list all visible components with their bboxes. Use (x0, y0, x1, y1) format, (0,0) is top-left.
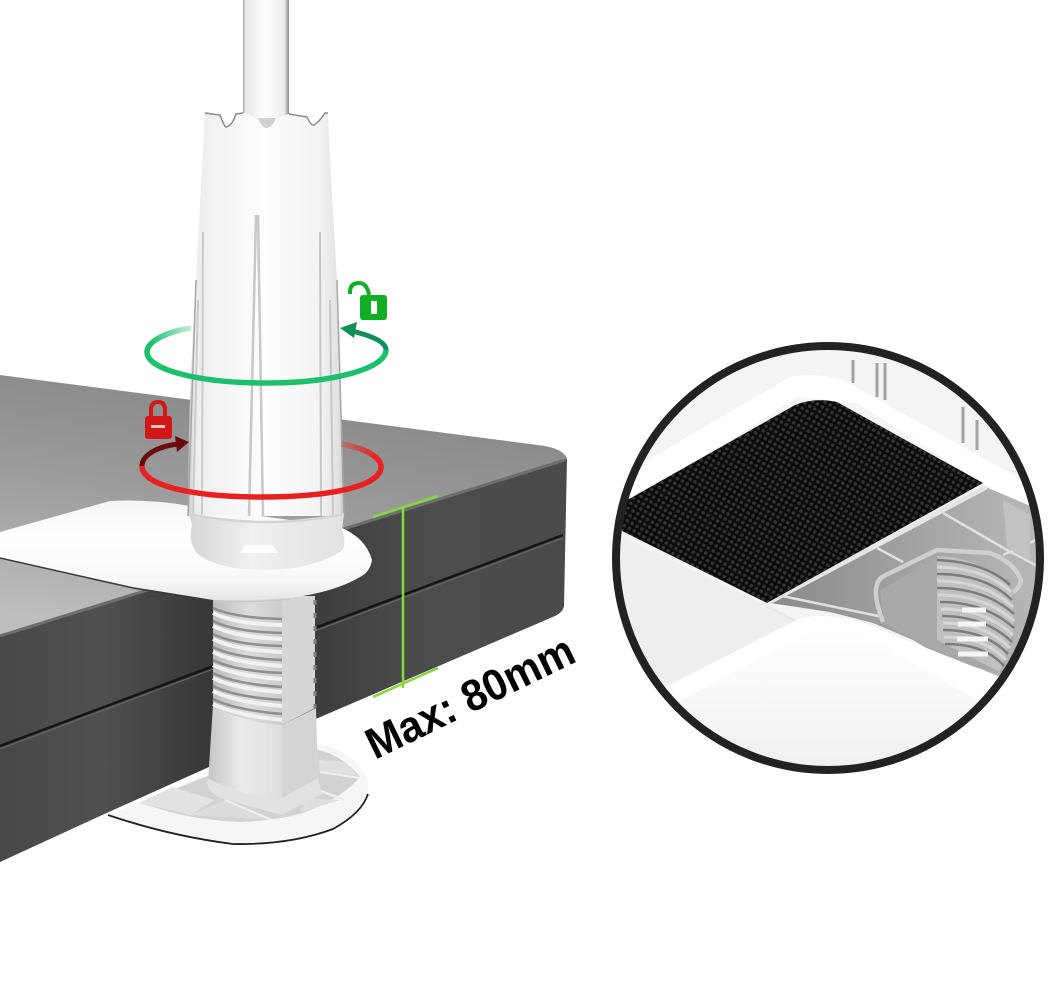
magnified detail circle (610, 340, 1050, 790)
screw foot collar (208, 778, 322, 815)
icon: open padlock (350, 283, 387, 320)
table top surface (0, 375, 567, 636)
screw housing (880, 578, 1015, 672)
upper sleeve detail (630, 376, 1029, 505)
top clamp plate (0, 501, 372, 602)
icon: closed padlock (145, 402, 172, 439)
red lock rotation arrow (142, 436, 381, 497)
max thickness dimension marker (373, 496, 438, 697)
detail circle ring (616, 346, 1040, 770)
max thickness label: Max: 80mm (358, 626, 583, 769)
table front face (0, 459, 567, 862)
grip pad (622, 400, 983, 603)
lower clamp plate detail (666, 616, 998, 702)
screw lower cylinder (208, 705, 282, 798)
screw threads lens (937, 556, 1014, 672)
bottom clamp plate (108, 743, 368, 844)
sleeve ribs (188, 215, 344, 516)
gooseneck tube (243, 0, 289, 128)
table (0, 375, 567, 862)
detail circle contents (620, 350, 1036, 766)
sleeve post (188, 0, 345, 570)
sleeve body (188, 113, 344, 516)
threaded screw (208, 596, 322, 815)
screw threads (213, 596, 315, 725)
sleeve collar (189, 514, 345, 570)
mechanism detail (770, 486, 1045, 677)
lower left face (620, 536, 795, 710)
green unlock rotation arrow (147, 322, 386, 383)
plate ribbed inner (140, 750, 360, 822)
